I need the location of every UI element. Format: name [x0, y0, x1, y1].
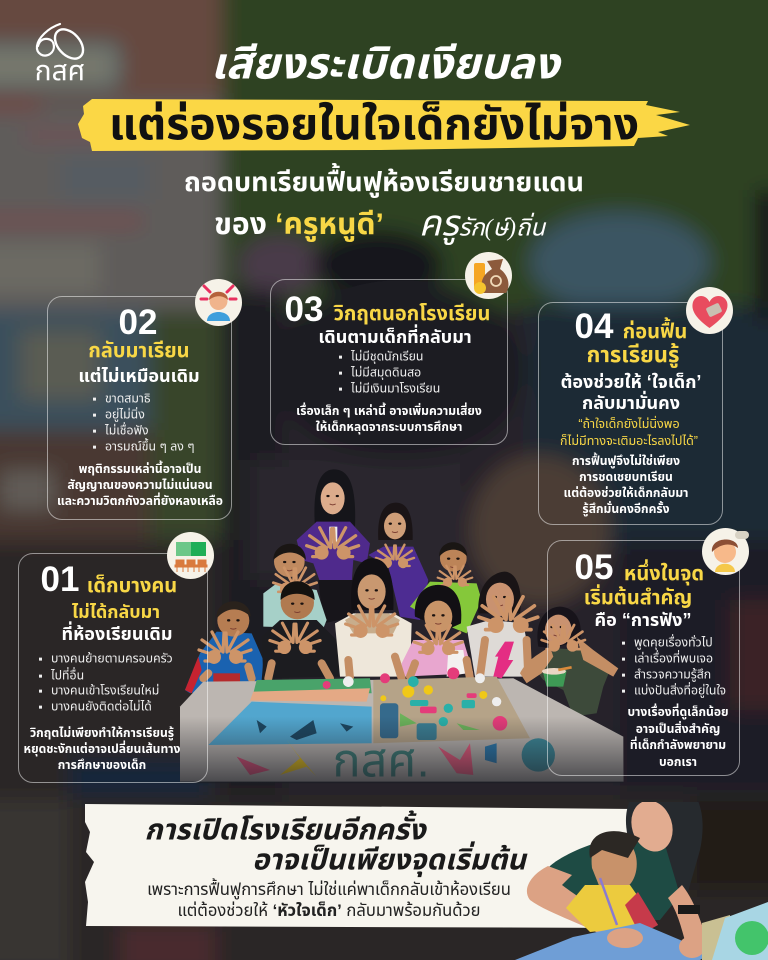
teacher and child photo	[515, 802, 768, 960]
bullet list: ไม่มีเงินมาโรงเรียน	[351, 382, 440, 396]
bullet list	[339, 350, 440, 396]
heading: one starting point: หนึ่งในจุด	[624, 563, 704, 585]
subheading: แต่ไม่เหมือนเดิม	[78, 366, 200, 386]
banner body text: เพราะการฟื้นฟูการศึกษา ไม่ใช่แค่พาเด็กกลับเข้าห้องเรียน	[147, 880, 511, 899]
heading: before learning recovery: ก่อนฟื้น	[623, 321, 687, 343]
panel: 03 crisis outside the school	[270, 279, 508, 445]
bullet list: บางคนยังติดต่อไม่ได้	[51, 700, 152, 714]
bullet list	[622, 634, 726, 698]
torn paper background	[85, 804, 628, 928]
icon: money bag	[465, 252, 512, 299]
bullet list: ไม่เชื่อฟัง	[105, 424, 149, 438]
bullet list	[93, 392, 195, 454]
summary text	[24, 726, 180, 772]
subheading: คือ “การฟัง”	[595, 610, 691, 630]
summary text: หยุดชะงักแต่อาจเปลี่ยนเส้นทาง	[24, 742, 180, 756]
banner heading line two: อาจเป็นเพียงจุดเริ่มต้น	[252, 845, 526, 877]
summary text: บางเรื่องที่ดูเล็กน้อย	[627, 705, 729, 719]
number 04: 04	[575, 307, 613, 346]
bullet list: ไม่มีสมุดดินสอ	[351, 366, 421, 380]
subheading: เดินตามเด็กที่กลับมา	[318, 327, 472, 347]
quote: ก็ไม่มีทางจะเติมอะไรลงไปได้”	[560, 434, 698, 448]
summary text: พฤติกรรมเหล่านี้อาจเป็น	[79, 462, 201, 476]
logo text: กสศ	[35, 55, 85, 86]
summary text: วิกฤตไม่เพียงทำให้การเรียนรู้	[30, 726, 174, 740]
banner body text: แต่ต้องช่วยให้ ‘หัวใจเด็ก’ กลับมาพร้อมกันด้วย	[177, 901, 481, 920]
highlighted headline	[78, 99, 690, 151]
summary text: ให้เด็กหลุดจากระบบการศึกษา	[316, 420, 462, 434]
subtitle: ถอดบทเรียนฟื้นฟูห้องเรียนชายแดน	[184, 167, 584, 197]
bullet list	[39, 652, 173, 714]
summary text	[564, 452, 688, 516]
summary text	[57, 460, 223, 508]
summary text: อาจเป็นสิ่งสำคัญ	[636, 722, 720, 736]
panel: 04 before recovery of learning	[538, 302, 723, 525]
bullet list: สำรวจความรู้สึก	[634, 668, 711, 682]
bottom banner	[85, 802, 768, 960]
handwritten label: ครูรัก(ษ์)ถิ่น	[419, 203, 545, 243]
summary text: ที่เด็กกำลังพยายาม	[630, 738, 726, 752]
heading line two: เริ่มต้นสำคัญ	[584, 587, 692, 609]
summary text: การฟื้นฟูจึงไม่ใช่เพียง	[572, 454, 680, 468]
subheading: ต้องช่วยให้ ‘ใจเด็ก’	[561, 372, 701, 392]
bullet list: ขาดสมาธิ	[105, 392, 151, 406]
summary text: แต่ต้องช่วยให้เด็กกลับมา	[564, 486, 688, 500]
bullet list: เล่าเรื่องที่พบเจอ	[634, 652, 713, 666]
subheading: ที่ห้องเรียนเดิม	[62, 624, 172, 644]
icon: logo loops	[36, 22, 84, 60]
bullet list: ไปที่อื่น	[51, 669, 84, 683]
summary text	[296, 402, 482, 434]
number 05: 05	[575, 548, 613, 587]
summary text: รู้สึกมั่นคงอีกครั้ง	[582, 502, 670, 516]
bullet list: บางคนย้ายตามครอบครัว	[51, 652, 173, 666]
summary text: สัญญาณของความไม่แน่นอน	[67, 478, 213, 492]
heading: crisis outside school: วิกฤตนอกโรงเรียน	[334, 303, 490, 325]
number 03: 03	[285, 290, 323, 329]
logo	[35, 22, 85, 86]
panel: 02 returned but not the same	[47, 296, 232, 520]
number 01: 01	[41, 560, 79, 599]
banner body text	[147, 878, 511, 920]
summary text	[627, 703, 729, 768]
subheading: กลับมามั่นคง	[582, 393, 680, 413]
subheading	[561, 372, 701, 413]
bullet list: อารมณ์ขึ้น ๆ ลง ๆ	[105, 440, 195, 454]
quote: “ถ้าใจเด็กยังไม่นิ่งพอ	[578, 417, 680, 431]
title: เสียงระเบิดเงียบลง	[211, 40, 559, 89]
summary text: และความวิตกกังวลที่ยังหลงเหลือ	[57, 494, 223, 508]
icon: classroom board and chairs	[167, 532, 214, 579]
panel: 01 some children did not come back	[18, 553, 208, 783]
icon: bandaged heart	[686, 287, 733, 334]
panel: 05 listening is a starting point	[547, 540, 740, 776]
headline text: แต่ร่องรอยในใจเด็กยังไม่จาง	[109, 100, 639, 149]
bullet list: พูดคุยเรื่องทั่วไป	[634, 636, 713, 650]
summary text: การชดเชยบทเรียน	[579, 470, 673, 484]
icon: child speaking	[702, 528, 749, 575]
heading: returned to school: กลับมาเรียน	[88, 340, 190, 362]
subtitle line two	[214, 203, 546, 245]
bullet list: อยู่ไม่นิ่ง	[105, 408, 145, 422]
bullet list: แบ่งปันสิ่งที่อยู่ในใจ	[634, 684, 726, 698]
summary text: เรื่องเล็ก ๆ เหล่านี้ อาจเพิ่มความเสี่ยง	[296, 404, 482, 418]
heading: some children: เด็กบางคน	[87, 575, 177, 597]
teacher name: ของ ‘ครูหนูดี’	[214, 208, 384, 241]
heading line two: การเรียนรู้	[587, 342, 679, 367]
group photo with children and clay map: กสศ.	[333, 735, 430, 787]
number 02: 02	[119, 303, 157, 342]
icon: stressed person	[195, 279, 242, 326]
heading line two: ไม่ได้กลับมา	[72, 602, 160, 622]
bullet list: บางคนเข้าโรงเรียนใหม่	[51, 684, 159, 698]
bullet list: ไม่มีชุดนักเรียน	[351, 350, 423, 364]
summary text: การศึกษาของเด็ก	[58, 758, 146, 772]
summary text: บอกเรา	[659, 754, 697, 768]
yellow brush stroke	[78, 99, 690, 151]
banner heading: การเปิดโรงเรียนอีกครั้ง	[145, 815, 425, 847]
quote	[560, 416, 698, 448]
